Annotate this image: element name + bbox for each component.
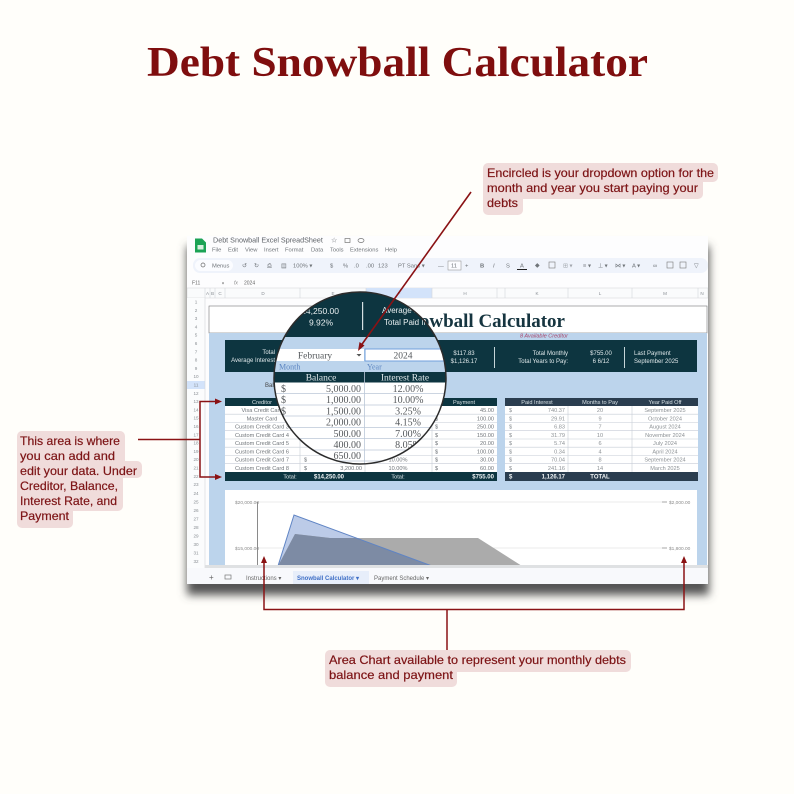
payoff table: 20 (597, 408, 603, 414)
creditor table: Custom Credit Card 5 (235, 441, 289, 447)
payoff table: 0.34 (554, 449, 565, 455)
row headers: 27 (193, 516, 199, 522)
creditor table: Balance (322, 400, 342, 406)
row headers: 7 (195, 349, 198, 354)
row headers (187, 298, 205, 568)
row headers: 17 (193, 432, 199, 437)
toolbar: ↺ (242, 262, 247, 270)
column headers: B (211, 291, 214, 296)
arrow: data area bracket (138, 398, 222, 480)
icon: sheets logo (195, 238, 206, 252)
payoff table: 31.79 (551, 433, 565, 439)
payoff table: 8 (598, 458, 602, 464)
payoff table: 14 (597, 466, 603, 472)
payoff table: Months to Pay (582, 400, 618, 406)
area chart: $20,000.00 (235, 500, 259, 506)
sheet title: Debt Snowball Calculator (355, 311, 566, 332)
row headers: 31 (193, 550, 199, 556)
magnified table rows: 400.00 (334, 440, 361, 451)
creditor table: Master Card (247, 416, 277, 422)
spreadsheet header: file name and menu: Tools (330, 248, 344, 254)
row headers: 13 (193, 399, 199, 404)
callout: data entry area: you can add and (20, 449, 115, 463)
creditor table: $ (304, 458, 308, 464)
callout: dropdown option: Encircled is your dropdown option for the (487, 166, 714, 180)
payoff table: Paid Interest (521, 400, 553, 406)
magnified table rows: 7.00% (395, 429, 421, 440)
magnified summary band (285, 292, 435, 337)
magnified table rows: $ (281, 406, 286, 418)
formula bar: ▾ (222, 280, 224, 286)
column headers: H (463, 291, 467, 296)
row headers: 24 (193, 491, 199, 496)
row headers: 4 (195, 324, 198, 329)
magnified table rows: 12.00% (393, 384, 423, 395)
toolbar: I (493, 264, 495, 270)
area chart: $2,000.00 (669, 500, 691, 506)
creditor table: 10.00% (389, 458, 408, 464)
sheet tabs: + (209, 573, 214, 582)
creditor table: Creditor (252, 400, 272, 406)
magnified table header (270, 372, 450, 382)
payoff table: April 2024 (652, 449, 678, 455)
creditor table: $ (435, 433, 439, 439)
summary panel: 6 6/12 (593, 359, 610, 365)
area chart (225, 490, 697, 566)
sheet tabs: Snowball Calculator ▾ (297, 576, 360, 582)
toolbar: ◆ (535, 263, 540, 269)
magnified table rows: 500.00 (334, 429, 361, 440)
magnifier circle: Average Interest (382, 306, 441, 315)
creditor table: 150.00 (477, 433, 494, 439)
payoff table: $ (509, 449, 513, 455)
summary panel: Average Interest (231, 358, 275, 364)
summary panel: $1,126.17 (451, 359, 478, 365)
row headers: 12 (193, 391, 199, 396)
payoff table: 5.74 (554, 441, 565, 447)
payoff table: 4 (598, 449, 602, 455)
payoff table: 9 (598, 416, 602, 422)
creditor table: Visa Credit Card (242, 408, 282, 414)
magnified table rows: $ (281, 395, 286, 406)
spreadsheet screenshot (187, 236, 709, 595)
callout: data entry area: Creditor, Balance, (20, 479, 118, 493)
payoff table: $ (509, 466, 513, 472)
payoff table: November 2024 (645, 433, 685, 439)
row headers: 30 (193, 542, 199, 547)
spreadsheet header: file name and menu: Debt Snowball Excel SpreadSheet (213, 236, 323, 244)
magnifier circle (270, 290, 450, 470)
payoff table: 6 (598, 441, 602, 447)
column headers: F (398, 291, 401, 296)
column headers: D (261, 291, 265, 296)
callout: data entry area: Interest Rate, and (20, 494, 117, 508)
payoff table: $ (509, 433, 513, 439)
scrollbar strip (205, 565, 708, 568)
callout: area chart: balance and payment (329, 668, 454, 682)
row headers: 16 (193, 424, 199, 429)
creditor table: 100.00 (477, 416, 494, 422)
creditor table: $755.00 (472, 474, 495, 480)
creditor table: Custom Credit Card 4 (235, 433, 289, 439)
callout: dropdown option (483, 163, 718, 215)
callout: dropdown option: debts (487, 196, 518, 210)
payoff table: August 2024 (649, 424, 681, 430)
row headers: 8 (195, 358, 198, 363)
creditor table: 250.00 (477, 424, 494, 430)
creditor table: Interest Rate (382, 400, 414, 406)
row headers: 10 (193, 374, 199, 379)
magnifier circle: Balance (306, 374, 336, 384)
spreadsheet header: file name and menu: File (212, 248, 221, 254)
creditor table: $ (435, 408, 439, 414)
sheet tabs: Payment Schedule ▾ (374, 576, 429, 582)
summary panel: Total Monthly (533, 351, 568, 357)
month dropdown: February (298, 352, 332, 362)
toolbar: A ▾ (632, 264, 640, 270)
blue balance area (279, 516, 354, 564)
magnified table rows: $ (281, 384, 286, 395)
row headers: 25 (193, 500, 199, 504)
toolbar: 123 (378, 264, 388, 270)
creditor table: $ (435, 458, 439, 464)
callout: data entry area: This area is where (20, 434, 120, 448)
magnified table rows: 4.15% (395, 418, 421, 428)
column headers: M (663, 291, 667, 296)
callout: data entry area: edit your data. Under (20, 464, 137, 478)
toolbar: ⊞ ▾ (563, 264, 572, 270)
magnified table rows: 2,000.00 (326, 418, 361, 428)
payoff table: March 2025 (650, 466, 680, 472)
toolbar: — (438, 264, 444, 270)
column headers: K (535, 291, 539, 296)
formula bar: fx (234, 280, 238, 286)
toolbar: ▽ (694, 264, 699, 270)
formula bar (192, 280, 255, 284)
callout: data entry area: Payment (20, 509, 70, 523)
arrow: chart bracket (261, 556, 687, 650)
payoff table: September 2024 (644, 458, 686, 464)
payoff table: September 2025 (644, 408, 686, 414)
row headers: 3 (195, 316, 198, 321)
year dropdown: 2024 (394, 352, 413, 362)
creditor table: 60.00 (480, 466, 494, 472)
grey payment area (278, 534, 522, 566)
payoff table: 10 (597, 433, 603, 439)
payoff table: 70.04 (551, 458, 565, 464)
magnified table rows (276, 372, 444, 464)
payoff table: $ (509, 424, 513, 430)
summary panel: September 2025 (634, 359, 679, 365)
toolbar: .00 (366, 264, 374, 270)
creditor table: Custom Credit Card 3 (235, 424, 289, 430)
magnifier circle: 9.92% (309, 318, 333, 328)
creditor table: 30.00 (480, 458, 494, 464)
creditor table: Custom Credit Card 7 (235, 458, 289, 464)
column headers: L (599, 291, 602, 296)
formula bar: 2024 (244, 280, 255, 286)
month dropdown (276, 349, 364, 361)
payoff table: 740.37 (548, 408, 565, 414)
toolbar: + (465, 264, 469, 270)
toolbar: ≡ ▾ (583, 264, 591, 270)
payoff table: 7 (598, 424, 602, 430)
column headers (187, 288, 708, 298)
sheet tabs (209, 571, 429, 584)
callout: area chart: Area Chart available to represent your monthly debts (329, 653, 626, 667)
summary panel (225, 340, 697, 372)
toolbar: A (520, 264, 524, 270)
toolbar: 11 (451, 264, 457, 270)
row headers: 20 (193, 457, 199, 462)
arrow: dropdown callout to month dropdown (358, 192, 471, 351)
callout: area chart (325, 650, 631, 687)
payoff table: 1,126.17 (542, 474, 566, 480)
magnifier circle: $14,250.00 (296, 306, 339, 316)
row headers: 26 (193, 508, 199, 513)
row headers: 28 (193, 525, 199, 530)
magnifier circle: Interest Rate (381, 374, 429, 384)
spreadsheet header: file name and menu: Insert (264, 248, 279, 254)
toolbar: ⋈ ▾ (615, 264, 625, 270)
row headers: 22 (193, 474, 199, 479)
row headers: 5 (195, 333, 198, 338)
creditor table (225, 398, 497, 481)
summary panel: $117.83 (453, 351, 475, 357)
row headers: 21 (193, 466, 199, 470)
area chart: $15,000.00 (235, 546, 259, 552)
payoff table: Year Paid Off (649, 400, 682, 406)
column headers: N (700, 291, 704, 296)
creditor table: Payment (453, 400, 475, 406)
creditor table: $14,250.00 (314, 474, 345, 480)
payoff table: $ (509, 408, 513, 414)
screenshot drop shadow (187, 246, 709, 595)
spreadsheet header: file name and menu (195, 237, 397, 252)
area chart: $1,800.00 (669, 546, 691, 552)
magnified table rows: 650.00 (334, 451, 361, 462)
column headers: C (218, 291, 222, 296)
payoff table: TOTAL (590, 474, 610, 480)
creditor table: 20.00 (480, 441, 494, 447)
year dropdown (365, 349, 450, 362)
row headers: 19 (193, 449, 199, 454)
row headers: 2 (195, 308, 198, 313)
summary panel: $755.00 (590, 351, 612, 357)
row headers: 15 (193, 416, 199, 421)
toolbar: ⊥ ▾ (598, 262, 608, 270)
summary panel: Total (262, 350, 275, 356)
toolbar: S (506, 264, 510, 270)
payoff table: $ (509, 416, 513, 422)
toolbar: ▤ (281, 264, 287, 270)
creditor table: 3,200.00 (340, 466, 362, 472)
payoff table: $ (509, 458, 513, 464)
creditor table: 45.00 (480, 408, 494, 414)
magnifier circle: Total Paid In (384, 318, 428, 327)
magnified table rows: 1,500.00 (326, 406, 361, 418)
payoff table: 6.83 (554, 424, 565, 430)
creditor table: Custom Credit Card 8 (235, 466, 289, 472)
row headers: 6 (195, 341, 198, 346)
spreadsheet header: file name and menu: ☆ (331, 236, 337, 244)
toolbar: ↻ (254, 262, 259, 270)
creditor table: $ (435, 466, 439, 472)
spreadsheet header: file name and menu: Help (385, 248, 397, 254)
toolbar: $ (330, 264, 334, 270)
magnified table rows: 3.25% (395, 406, 421, 418)
creditor table: 10.00% (389, 466, 408, 472)
toolbar (193, 258, 708, 273)
payoff table (505, 398, 698, 481)
creditor table: Custom Credit Card 6 (235, 449, 289, 455)
magnifier circle: Month (279, 362, 300, 372)
toolbar: ∞ (653, 264, 657, 270)
spreadsheet header: file name and menu: Extensions (350, 248, 378, 254)
row headers: 29 (193, 534, 199, 538)
toolbar: Menus (212, 264, 230, 270)
payoff table: $ (509, 474, 513, 480)
magnified table rows: 5,000.00 (326, 384, 361, 395)
balance label: Balance (265, 383, 287, 389)
spreadsheet header: file name and menu: Data (311, 248, 324, 254)
row headers: 23 (193, 482, 199, 487)
row headers: 1 (195, 300, 198, 304)
creditor table: Total: (391, 474, 405, 480)
payoff table: $ (509, 441, 513, 447)
spreadsheet header: file name and menu: View (245, 248, 258, 254)
payoff table: 241.16 (548, 466, 565, 472)
available creditor note: 8 Available Creditor (520, 334, 569, 340)
overlap of the areas (278, 534, 432, 566)
magnified table rows: 8.05% (395, 440, 421, 451)
row headers: 11 (194, 382, 199, 388)
toolbar: B (480, 264, 484, 270)
spreadsheet header: file name and menu: Format (285, 248, 304, 254)
callout: dropdown option: month and year you start paying your (487, 181, 698, 195)
toolbar: .0 (354, 264, 359, 270)
row headers: 9 (195, 366, 198, 371)
row headers: 32 (193, 559, 199, 564)
row headers: 18 (193, 441, 199, 446)
magnifier circle: Year (367, 362, 382, 372)
payoff table: October 2024 (648, 416, 682, 422)
creditor table: Total: (283, 474, 297, 480)
summary panel: Total Years to Pay: (518, 359, 568, 365)
callout: data entry area (17, 431, 142, 528)
toolbar: 100% ▾ (293, 264, 312, 270)
row headers: 14 (193, 407, 199, 412)
creditor table: $ (435, 424, 439, 430)
creditor table: 100.00 (477, 449, 494, 455)
title: Debt Snowball Calculator (147, 40, 648, 86)
creditor table: $ (304, 466, 308, 472)
creditor table: $ (435, 416, 439, 422)
payoff table: July 2024 (653, 441, 677, 447)
summary panel: Last Payment (634, 351, 671, 357)
column headers: A (206, 291, 210, 296)
toolbar: PT Sans ▾ (398, 264, 425, 270)
payoff table: 29.91 (551, 416, 565, 422)
toolbar: ⎙ (267, 262, 272, 270)
magnified table rows: 1,000.00 (326, 395, 361, 406)
toolbar: % (343, 264, 348, 270)
sheet body (209, 306, 707, 333)
creditor table: $ (435, 449, 439, 455)
sheet tabs: Instructions ▾ (246, 576, 281, 582)
magnified table rows: 10.00% (393, 395, 423, 406)
column headers: E (331, 291, 335, 296)
spreadsheet header: file name and menu: Edit (228, 248, 238, 254)
creditor table: $ (435, 441, 439, 447)
formula bar: F11 (192, 280, 200, 286)
